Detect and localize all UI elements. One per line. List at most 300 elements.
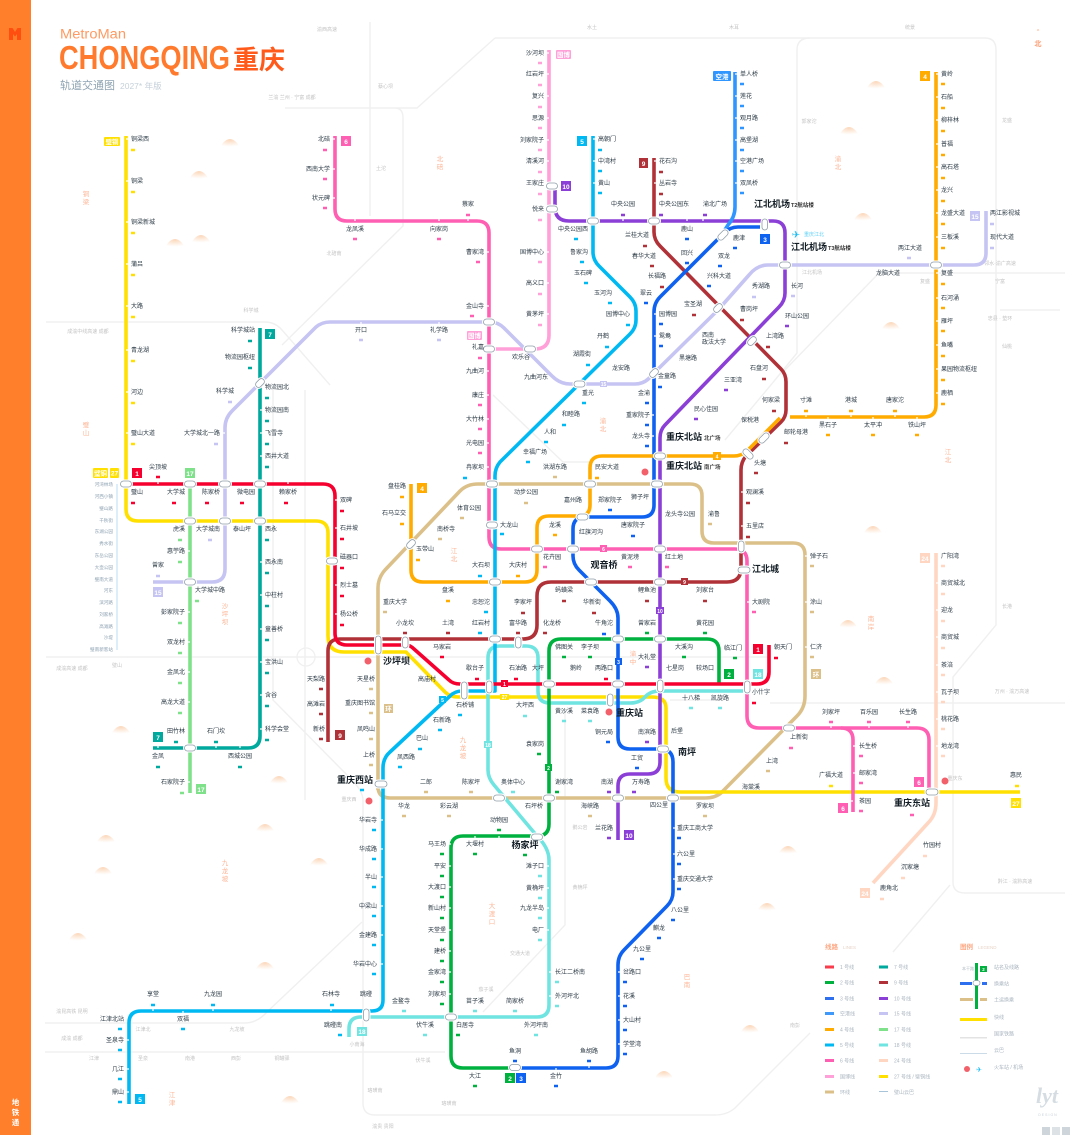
stations: line 1: 较场口 [696, 664, 714, 672]
stations: line 1: 朝天门 [774, 643, 792, 651]
stations: line 4: 黑石子 [819, 422, 837, 429]
stations: line 10 [595, 200, 809, 838]
line number badges: 3 [519, 1076, 523, 1083]
left orange sidebar [0, 0, 31, 1135]
stations: ring line: 洪湖东路 [543, 463, 567, 471]
district labels: 北 [451, 555, 458, 563]
stations: line 15 and 17: 秀湖路 [752, 282, 770, 290]
stations: ring line: 凤鸣山 [357, 725, 375, 733]
stations: line 2: 大江 [469, 1072, 481, 1080]
stations: yellow 27 line: 河边 [131, 388, 143, 396]
legend: lines: 1 号线 [840, 964, 854, 971]
stations: line 3 and airport: 工贸 [631, 754, 643, 762]
stations: line 3 and airport: 单人桥 [740, 70, 758, 78]
stations: guobo line [512, 49, 544, 361]
stations: line 4: 盘桂路 [388, 482, 406, 490]
railway labels: 渝西高速 [317, 26, 337, 33]
stations: line 6: 红土地 [665, 553, 683, 561]
railway labels: 科学城 [243, 307, 259, 314]
legend: lines: 5 号线 [840, 1042, 854, 1049]
line 4 [411, 72, 936, 582]
stations: line 4: 石河涌 [941, 294, 959, 302]
stations: ring line: 涂山 [810, 598, 822, 606]
stations: line 3 and airport: 鱼胡路 [580, 1047, 598, 1055]
stations: line 5: 丹鹤 [597, 332, 609, 340]
stations: line 15 and 17: 惠苧路 [167, 547, 185, 555]
stations: line 9: 保税港 [741, 416, 759, 424]
stations: line 5: 冉家坝 [466, 463, 484, 471]
district labels: 南 [868, 614, 875, 623]
stations: line 24: 迎龙 [941, 606, 953, 614]
stations: line 4: 石马立交 [382, 509, 406, 517]
line number badges: 7 [156, 735, 160, 742]
district labels: 北 [835, 163, 842, 171]
railway labels: 南港 [185, 1055, 195, 1062]
stations: line 2: 谢家湾 [555, 778, 573, 786]
line number badges: 1 [756, 647, 760, 654]
railway labels: 渝贵 贵阳 [372, 1123, 394, 1130]
line number badges: 4 [716, 454, 719, 460]
stations: ring line: 上湾 [766, 757, 778, 765]
line number badges: 6 [344, 139, 348, 146]
stations: line 18: 长江二桥南 [555, 968, 585, 976]
stations: line 3 and airport: 金童路 [658, 372, 676, 380]
stations: guobo line: 刘家院子 [520, 136, 544, 144]
stations: line 6: 上新街 [790, 733, 808, 741]
stations: line 1: 临江门 [724, 644, 742, 652]
bishan cloud rail line: 璧山路 [99, 505, 113, 512]
stations: line 10: 政法大学 [702, 338, 726, 346]
district labels: 山 [83, 428, 89, 437]
stations: line 1: 尖顶坡 [149, 463, 167, 471]
stations: line 6: 向家岗 [430, 225, 448, 233]
stations: line 4: 龙兴 [941, 186, 953, 194]
stations: line 1: 七星岗 [666, 664, 684, 672]
stations: line 5: 忠恕沱 [472, 598, 490, 606]
stations: line 4: 太平冲 [864, 421, 882, 429]
legend: symbols: 2 [982, 967, 985, 972]
railway labels: 珞璜南 [367, 1087, 383, 1094]
stations: line 10: 西南 [702, 331, 714, 339]
stations: guobo line: 黄茅坪 [526, 310, 544, 318]
stations: line 3 and airport: 园博园 [659, 310, 677, 318]
stations: line 9: 长福路 [648, 272, 666, 280]
district labels: 璧 [83, 420, 90, 429]
line number badges: 璧铜 [94, 468, 108, 478]
stations: line 3 and airport: 学堂湾 [623, 1040, 641, 1048]
stations: line 5: 双福 [177, 1015, 189, 1023]
district labels: 坪 [222, 610, 229, 618]
stations: guobo line: 清溪河 [526, 157, 544, 165]
stations: line 10: 三亚湾 [724, 376, 742, 384]
icon: airport plane and 国际 label: ✈ [792, 230, 800, 241]
stations: line 3 and airport: 高堡湖 [740, 136, 758, 144]
stations: line 5: 跳磴南 [324, 1021, 342, 1029]
stations: line 3 and airport: 铜元局 [595, 728, 613, 736]
railway labels: 黔江 · 渝黔高速 [998, 878, 1032, 885]
stations: line 5: 大龙山 [500, 521, 518, 529]
line number badges: 璧铜 [106, 137, 119, 146]
legend: symbols: 本干路 [962, 965, 974, 971]
stations: line 1: 杨公桥 [340, 610, 358, 618]
district labels: 坝 [222, 617, 229, 626]
district labels: 津 [169, 1099, 176, 1107]
line number badges: 17 [197, 787, 205, 794]
legend: lines: 15 号线 [894, 1010, 911, 1018]
major hub station labels: 北广场 [704, 434, 721, 442]
stations: line 4: 民安大道 [595, 463, 619, 471]
stations: line 6: 刘家坪 [822, 708, 840, 716]
stations: line 2: 刘家坝 [428, 990, 446, 998]
stations: line 6: 黄泥塝 [621, 553, 639, 561]
stations: line 5: 华岩寺 [359, 816, 377, 824]
designer logo and QR code: lyt [1036, 1083, 1059, 1108]
railway labels: 西彭 [231, 1055, 241, 1062]
legend: symbols: 快线 [994, 1014, 1004, 1021]
line 15 [153, 211, 986, 582]
stations: line 5: 幸福广场 [523, 448, 547, 456]
stations: line 7: 中柱村 [265, 591, 283, 599]
district labels: 大 [489, 901, 496, 910]
stations: guobo line: 悦来 [532, 205, 544, 213]
legend: lines: 3 号线 [840, 996, 854, 1002]
district labels: 龙 [460, 743, 467, 752]
legend: lines: LINES [843, 945, 856, 950]
line number badges: 10 [562, 184, 570, 191]
stations: line 9: 新桥 [313, 725, 325, 733]
stations: line 4: 石船 [941, 93, 953, 101]
stations: line 18: 黄沙溪 [555, 707, 573, 715]
stations: line 3 and airport: 回兴 [681, 249, 693, 257]
stations: line 3 and airport: 麒龙 [653, 924, 665, 932]
stations: line 10: 环山公园 [785, 312, 809, 320]
railway labels: 九龙坡 [229, 1026, 245, 1033]
stations: line 6: 光电园 [466, 439, 484, 447]
district labels: 渡 [489, 909, 496, 918]
railway labels: 重庆西 [341, 796, 357, 803]
bishan cloud rail line: 河湾林场 [95, 481, 113, 488]
stations: line 15 and 17: 彭家院子 [161, 608, 185, 616]
sidebar brand text: 铁 [12, 1107, 20, 1117]
icon: airport plane and 国际 label: 重庆江北 [804, 231, 824, 238]
stations: line 5: 湖霞街 [573, 350, 591, 358]
station ticks [126, 53, 939, 1092]
bishan cloud rail line: 河东 [104, 587, 113, 593]
stations: line 18: 十八梯 [682, 694, 700, 702]
title block: CHONGQING [59, 39, 230, 76]
stations: line 4: 雁坪 [941, 317, 953, 325]
line 7 [153, 328, 260, 748]
stations: line 1: 璧山 [131, 488, 143, 496]
stations: line 2: 大溪沟 [675, 643, 693, 651]
stations: line 6: 邮家湾 [859, 769, 877, 777]
stations: line 24: 地龙湾 [941, 742, 959, 750]
stations: line 10: 民心佳园 [694, 405, 718, 413]
line number badges: 27 [1012, 801, 1020, 808]
stations: line 4: 鱼嘴 [941, 341, 953, 349]
stations: line 3 and airport: 空港广场 [740, 157, 764, 165]
stations: line 1: 大学城 [167, 488, 185, 496]
stations: line 4: 复盛 [941, 269, 953, 277]
stations: line 24: 瓦子坝 [941, 688, 959, 696]
stations: line 15 and 17: 现代大道 [990, 233, 1014, 241]
stations: line 1: 马家岩 [433, 643, 451, 651]
stations: line 6: 状元碑 [312, 194, 330, 202]
railway labels: 鹅公岩 [572, 824, 588, 831]
guobo line [489, 50, 549, 349]
stations: ring line: 二郎 [420, 778, 432, 786]
stations: line 9: 化龙桥 [543, 619, 561, 627]
stations: line 4: 玉带山 [416, 545, 434, 553]
railway labels: 江北机场 [802, 269, 822, 276]
stations: line 5: 石林寺 [322, 990, 340, 998]
stations: line 5: 石桥铺 [456, 701, 474, 709]
line number badges: 5 [580, 139, 584, 146]
stations: line 5: 巴山 [416, 734, 428, 742]
stations: line 2: 大渡口 [428, 883, 446, 891]
bishan cloud rail line: 河西小镇 [95, 493, 113, 500]
railway labels: 蔡心坝 [378, 83, 393, 90]
railway labels: 忠县 · 垫环 [988, 315, 1012, 322]
stations: line 24 [880, 552, 965, 899]
line 1 [126, 484, 769, 684]
stations: line 7: 物流园南 [265, 406, 289, 414]
railway labels: 复盛 [920, 278, 930, 285]
railway labels: 铜罐驿 [274, 1055, 290, 1062]
stations: line 5: 红岩村 [472, 619, 490, 627]
stations: line 24: 沉家塘 [901, 863, 919, 871]
line number badges: 18 [485, 743, 491, 749]
line number badges [93, 50, 1021, 1104]
line number badges: 1 [135, 471, 139, 478]
stations: line 7: 飞雪寺 [265, 429, 283, 437]
bishan cloud rail line: 秀水街 [99, 540, 113, 547]
line number badges: 6 [917, 780, 921, 787]
stations: line 2 [428, 619, 737, 1086]
stations: line 3 and airport: 四公里 [650, 802, 668, 809]
stations: ring line: 华龙 [398, 802, 410, 810]
line number badges: 9 [683, 580, 686, 586]
major hub station labels: 江北机场 [791, 241, 827, 252]
stations: line 5: 九曲河东 [524, 373, 548, 381]
railway labels: 璧山 [112, 662, 122, 669]
line 3 [515, 227, 760, 1068]
stations: line 18: 金鳌寺 [392, 997, 410, 1005]
stations: line 4: 鹿栖 [941, 389, 953, 397]
stations: line 1 [131, 463, 792, 703]
stations: line 24: 商贸城 [941, 633, 959, 641]
stations: line 5: 和睦路 [562, 410, 580, 418]
railway labels: 茄子溪 [478, 986, 494, 993]
stations: line 6: 曹家湾 [466, 248, 484, 256]
stations: yellow 27 line: 大路 [131, 302, 143, 310]
legend: lines [825, 942, 930, 1096]
sidebar brand text: 地 [12, 1097, 20, 1107]
bishan cloud rail line: 大壶公园 [95, 564, 113, 571]
stations: yellow 27 line: 青龙湖 [131, 346, 149, 354]
stations: yellow 27 line [131, 135, 1022, 791]
stations: line 6: 金山寺 [466, 302, 484, 310]
line number badges: 7 [268, 332, 272, 339]
line number badges: 2 [508, 1076, 512, 1083]
stations: yellow 27 line: 海棠溪 [742, 783, 760, 791]
stations: line 2: 黄花园 [696, 619, 714, 627]
stations: line 2: 建桥 [434, 947, 446, 955]
district labels: 九 [460, 735, 467, 744]
stations: line 5: 龙安路 [612, 364, 630, 372]
stations: line 6: 北碚 [318, 135, 330, 143]
legend: lines: 10 号线 [894, 996, 911, 1002]
district labels: 北 [945, 456, 952, 464]
stations: ring line: 上桥 [363, 751, 375, 759]
stations: line 7: 金凤 [152, 752, 164, 760]
stations: line 18: 滩子口 [526, 862, 544, 870]
stations: line 4: 寸滩 [800, 396, 812, 404]
stations: line 15 and 17: 金凤北 [167, 668, 185, 676]
stations: line 5: 鲁家沟 [570, 248, 588, 256]
stations: line 3 and airport: 唐家院子 [621, 521, 645, 529]
stations: line 3 and airport: 莲花 [740, 92, 752, 100]
legend: lines: 6 号线 [840, 1058, 854, 1064]
stations: yellow 27 line: 铜梁西 [131, 135, 149, 143]
district labels: 巴 [684, 973, 691, 981]
stations: line 3 and airport: 郑家院子 [598, 496, 622, 504]
legend: symbols [960, 942, 1023, 1074]
line 18 [349, 646, 743, 1037]
compass: north: 北 [1034, 39, 1042, 48]
stations: guobo line: 高义口 [526, 279, 544, 287]
title block: 2027* 年版 [120, 81, 162, 91]
stations: guobo line: 沙河坝 [526, 49, 544, 57]
stations: guobo line: 国博中心 [520, 248, 544, 256]
stations: line 9: 蚂蟥梁 [555, 586, 573, 594]
legend: lines: 18 号线 [894, 1042, 911, 1049]
major hub station labels: 重庆东站 [894, 797, 930, 808]
stations: line 5: 江津北站 [100, 1015, 124, 1023]
stations: line 7: 科学会堂 [265, 725, 289, 733]
stations: guobo line: 红岩坪 [526, 70, 544, 78]
railway labels: 南彭 [790, 1022, 800, 1029]
title block: 重庆 [233, 45, 285, 75]
district labels: 龙 [222, 866, 229, 875]
stations: line 4: 龙溪 [549, 521, 561, 529]
stations: line 9: 李家坪 [514, 598, 532, 606]
railway labels: 长港 [1002, 603, 1012, 610]
railway labels: 小南海 [349, 1041, 365, 1048]
stations: line 2: 白居寺 [456, 1021, 474, 1029]
compass: north [1034, 29, 1042, 48]
stations: ring line: 渝鲁 [708, 510, 720, 518]
stations: line 1: 小什字 [752, 688, 770, 696]
stations: line 10: 兰花路 [595, 824, 613, 832]
line number badges: 2 [547, 766, 550, 772]
district labels: 口 [489, 918, 495, 926]
stations: line 18: 黄桷坪 [526, 884, 544, 892]
stations: line 5: 九龙园 [204, 990, 222, 998]
railway labels: 郭家沱 [801, 118, 817, 125]
railway labels: 伏牛溪 [415, 1057, 431, 1064]
stations: line 24: 竹园村 [923, 841, 941, 849]
title block: MetroMan [60, 26, 126, 42]
line number badges: 环 [385, 705, 392, 713]
railway labels: 统景 [905, 24, 915, 31]
stations: line 1: 磁器口 [340, 553, 358, 561]
stations: line 24: 商贸城北 [941, 579, 965, 587]
stations: line 9: 天梨路 [307, 675, 325, 683]
railway labels: 水土 [587, 24, 597, 31]
stations: line 7: 物流园枢纽 [225, 353, 255, 361]
major hub station labels: T3航站楼 [828, 244, 851, 252]
stations: line 18 [392, 694, 729, 1035]
stations: line 4: 高石塔 [941, 163, 959, 171]
stations: line 3 and airport: 狮子坪 [631, 493, 649, 501]
stations: line 3 and airport: 大山村 [623, 1016, 641, 1024]
district labels: 梁 [83, 197, 90, 206]
line number badges: 3 [763, 237, 767, 244]
line number badges: 6 [602, 547, 605, 553]
stations: line 18: 伏牛溪 [416, 1021, 434, 1029]
line number badges: 15 [154, 590, 162, 597]
legend: symbols: 换乘站 [994, 980, 1009, 988]
bishan cloud rail line: 滨河路 [99, 599, 113, 606]
stations: ring line: 体育公园 [457, 504, 481, 512]
stations: line 2: 马王场 [428, 840, 446, 848]
stations: line 9: 五里店 [746, 522, 764, 530]
stations: line 5: 玉河沟 [594, 289, 612, 297]
line number badges: 15 [601, 382, 606, 388]
legend: symbols: 站名及线路 [994, 964, 1019, 971]
line 2 [451, 639, 719, 1068]
stations: line 3 and airport: 重家院子 [626, 411, 650, 419]
stations: line 4: 港城 [845, 396, 857, 404]
stations: line 1: 石井坡 [340, 524, 358, 532]
major hub station labels: 江北机场 [754, 198, 790, 209]
railway labels: 木耳 [729, 24, 739, 31]
bishan cloud rail line: 璧南新客站 [90, 646, 113, 653]
stations: line 15 and 17: 两江影视城 [990, 209, 1020, 217]
stations: line 6: 龙凤溪 [346, 225, 364, 233]
district labels: 渝 [630, 649, 637, 658]
stations: line 10: 南湖 [601, 778, 613, 786]
stations: ring line: 天星桥 [357, 675, 375, 683]
stations: line 6: 茶园 [859, 797, 871, 805]
stations: line 3 and airport: 鸳鸯 [659, 332, 671, 340]
stations: line 18: 凯旋路 [711, 694, 729, 702]
district labels: 北 [600, 425, 607, 433]
line number badges: 空港 [716, 72, 729, 81]
stations: line 6: 礼嘉 [472, 343, 484, 351]
bishan cloud rail line [90, 481, 117, 653]
legend: lines: 璧山云巴 [894, 1089, 914, 1096]
stations: ring line: 仁济 [810, 643, 822, 651]
line number badges: 9 [338, 733, 342, 740]
stations: yellow 27 line: 大坪西 [516, 701, 534, 709]
stations: line 5: 半山 [365, 873, 377, 881]
legend: symbols: 国家铁路 [994, 1030, 1014, 1038]
interchange station ovals [120, 183, 942, 1070]
stations: line 18: 外河坪南 [524, 1021, 548, 1029]
stations: line 2: 李子坝 [581, 643, 599, 651]
stations: line 3 and airport: 兴科大道 [707, 272, 731, 280]
railway labels: 交通大道 [510, 950, 530, 957]
stations: ring line: 南桥寺 [437, 525, 455, 533]
district labels: 北 [437, 155, 444, 163]
railway labels: 重庆东 [947, 775, 963, 782]
stations: line 2: 新山村 [428, 904, 446, 912]
stations: line 3 and airport [509, 70, 764, 1086]
stations: line 9: 兰桂大道 [625, 231, 649, 239]
legend: lines: 7 号线 [894, 964, 908, 971]
